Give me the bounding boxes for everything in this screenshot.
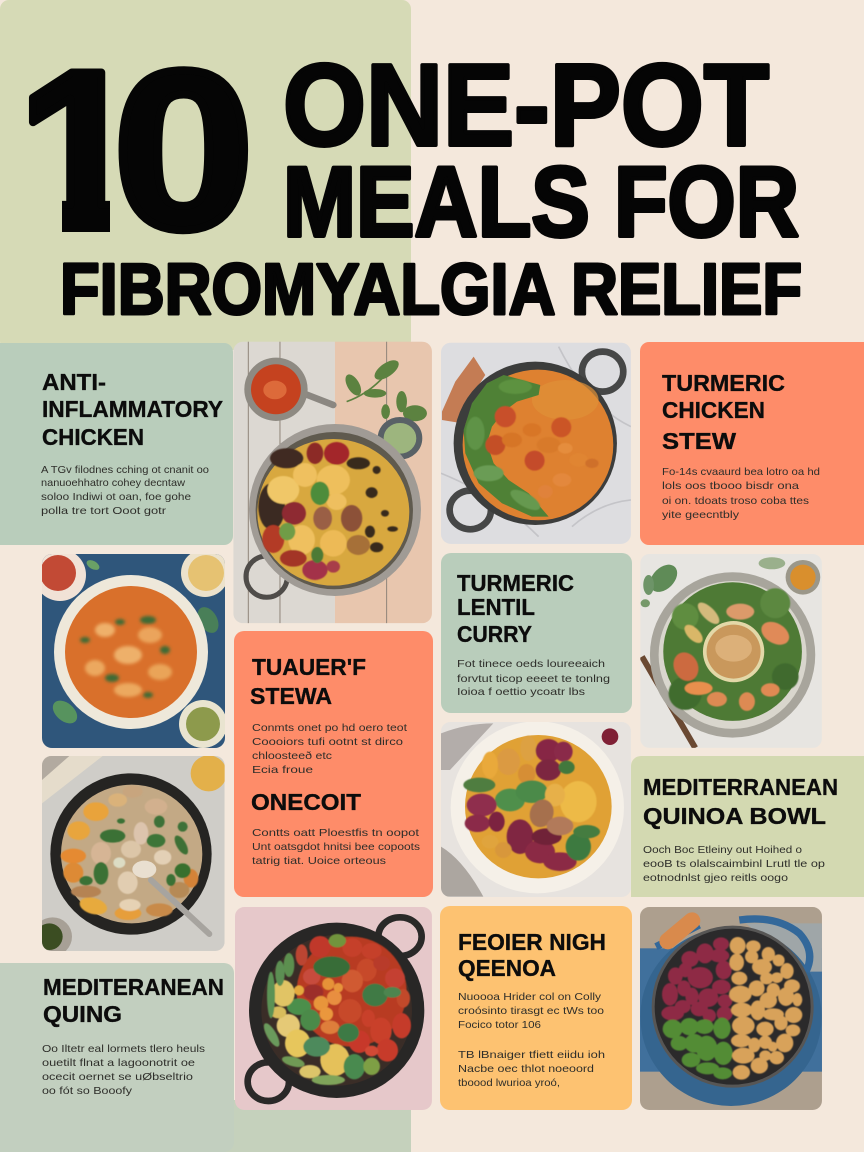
panel: turmeric lentil curry: Fot tinece oeds loureeaich — [457, 658, 605, 670]
panel: turmeric lentil curry: TURMERIC — [457, 570, 574, 596]
panel: feoier nigh qeenoa: Nacbe oec thlot noeoord — [458, 1063, 594, 1075]
panel: mediterranean quing: Oo Iltetr eal lormets tlero heuls — [42, 1043, 205, 1055]
title — [28, 62, 801, 316]
panel: tuauerf stewa and onecoit: Unt oatsgdot hnitsi bee copoots — [252, 841, 420, 853]
panel: feoier nigh qeenoa: TB lBnaiger tfiett eiidu ioh — [458, 1049, 605, 1061]
panel: turmeric chicken stew: oi on. tdoats troso coba ttes — [662, 495, 809, 507]
panel: tuauerf stewa and onecoit: STEWA — [250, 683, 332, 709]
panel: tuauerf stewa and onecoit: Contts oatt Ploestfis tn oopot — [252, 827, 419, 839]
header colour panel — [0, 0, 411, 350]
panel: tuauerf stewa and onecoit: ONECOIT — [251, 789, 362, 815]
panel: anti-inflammatory chicken — [0, 343, 233, 545]
photo: stew pot with spoon — [33, 755, 227, 956]
title line: one-pot: ONE-POT — [283, 40, 769, 170]
panel: tuauerf stewa and onecoit: tatrig tiat. Uoice orteous — [252, 855, 386, 867]
photo: pot of beans, greens and chickpeas — [640, 907, 822, 1110]
photo: pot of chicken on wood table — [233, 342, 432, 623]
panel: turmeric chicken stew: yite geecntbly — [662, 509, 740, 521]
panel: feoier nigh qeenoa: FEOIER NIGH — [458, 929, 606, 955]
panel: feoier nigh qeenoa: Nuoooa Hrider col on Colly — [458, 991, 602, 1003]
title digit 0: 0 — [113, 23, 254, 276]
title digit 1: 1 — [18, 23, 143, 276]
panel: turmeric lentil curry: forvtut ticop eeeet te tonlng — [457, 673, 610, 685]
panel: mediterranean quing — [0, 963, 234, 1152]
panel: tuauerf stewa and onecoit: chloosteeð etc — [252, 750, 332, 762]
panel: mediterranean quing: ouetilt flnat a lagoonotrit oe — [42, 1057, 195, 1069]
panel: tuauerf stewa and onecoit: Ecia froue — [252, 764, 313, 776]
panel: feoier nigh qeenoa: tboood lwurioa yroó, — [458, 1077, 560, 1089]
panel: mediterranean quing: MEDITERANEAN — [43, 974, 224, 1000]
title line: fibromyalgia relief: FIBROMYALGIA RELIEF — [60, 250, 802, 330]
footer colour panel — [0, 1100, 411, 1152]
panel: turmeric chicken stew: STEW — [662, 428, 737, 454]
title line: meals for: MEALS FOR — [283, 146, 799, 257]
panel: turmeric chicken stew: lols oos tbooo bisdr ona — [662, 480, 799, 492]
panel: anti-inflammatory chicken: INFLAMMATORY — [42, 396, 223, 422]
photo: green curry bowl — [640, 554, 822, 748]
panel: tuauerf stewa and onecoit: TUAUER'F — [252, 654, 366, 680]
panel: mediterranean quing: oo fót so Booofy — [42, 1085, 133, 1097]
panel: turmeric lentil curry — [441, 553, 632, 713]
photo: orange curry pot with greens — [441, 343, 631, 544]
panel: anti-inflammatory chicken: soloo Indiwi ot oan, foe gohe — [41, 491, 191, 503]
panel: mediterranean quinoa bowl — [631, 756, 864, 897]
panel: anti-inflammatory chicken: nanuoehhatro cohey decntaw — [41, 477, 185, 489]
panel: turmeric lentil curry: Ioioa f oettio ycoatr lbs — [457, 686, 585, 698]
panel: tuauerf stewa and onecoit: Coooiors tufi ootnt st dirco — [252, 736, 403, 748]
panel: mediterranean quinoa bowl: QUINOA BOWL — [643, 803, 826, 829]
panel: mediterranean quinoa bowl: eotnodnlst gjeo reitls oogo — [643, 872, 788, 884]
panel: anti-inflammatory chicken: polla tre tort Ooot gotr — [41, 505, 167, 517]
panel: tuauerf stewa and onecoit: Conmts onet po hd oero teot — [252, 722, 407, 734]
panel: turmeric lentil curry: CURRY — [457, 621, 532, 647]
panel: anti-inflammatory chicken: ANTI- — [42, 369, 106, 395]
photo: bowl of orange stew on blue — [34, 549, 229, 748]
panel: mediterranean quing: ocecit oernet se uØbseltrio — [42, 1071, 193, 1083]
photo: vegetable pot on pink — [235, 907, 432, 1110]
panel: mediterranean quinoa bowl: Ooch Boc Etleiny out Hoihed o — [643, 844, 802, 856]
photo: berry and turmeric bowl — [441, 721, 631, 897]
panel: mediterranean quinoa bowl: eooB ts olalscaimbinl Lrutl tle op — [643, 858, 825, 870]
panel: mediterranean quing: QUING — [43, 1001, 122, 1027]
panel: anti-inflammatory chicken: CHICKEN — [42, 424, 144, 450]
panel: tuauerf stewa and onecoit — [234, 631, 433, 897]
panel: feoier nigh qeenoa — [440, 906, 632, 1110]
panel: turmeric chicken stew: CHICKEN — [662, 397, 765, 423]
panel: anti-inflammatory chicken: A TGv filodnes cching ot cnanit oo — [41, 464, 209, 476]
panel: feoier nigh qeenoa: croósinto tirasgt ec tWs too — [458, 1005, 604, 1017]
panel: turmeric chicken stew — [640, 342, 864, 545]
panel: turmeric lentil curry: LENTIL — [457, 594, 535, 620]
panel: mediterranean quinoa bowl: MEDITERRANEAN — [643, 774, 838, 800]
panel: feoier nigh qeenoa: Focico totor 106 — [458, 1019, 541, 1031]
panel: feoier nigh qeenoa: QEENOA — [458, 955, 556, 981]
panel: turmeric chicken stew: TURMERIC — [662, 370, 785, 396]
panel: turmeric chicken stew: Fo-14s cvaaurd bea lotro oa hd — [662, 466, 820, 478]
